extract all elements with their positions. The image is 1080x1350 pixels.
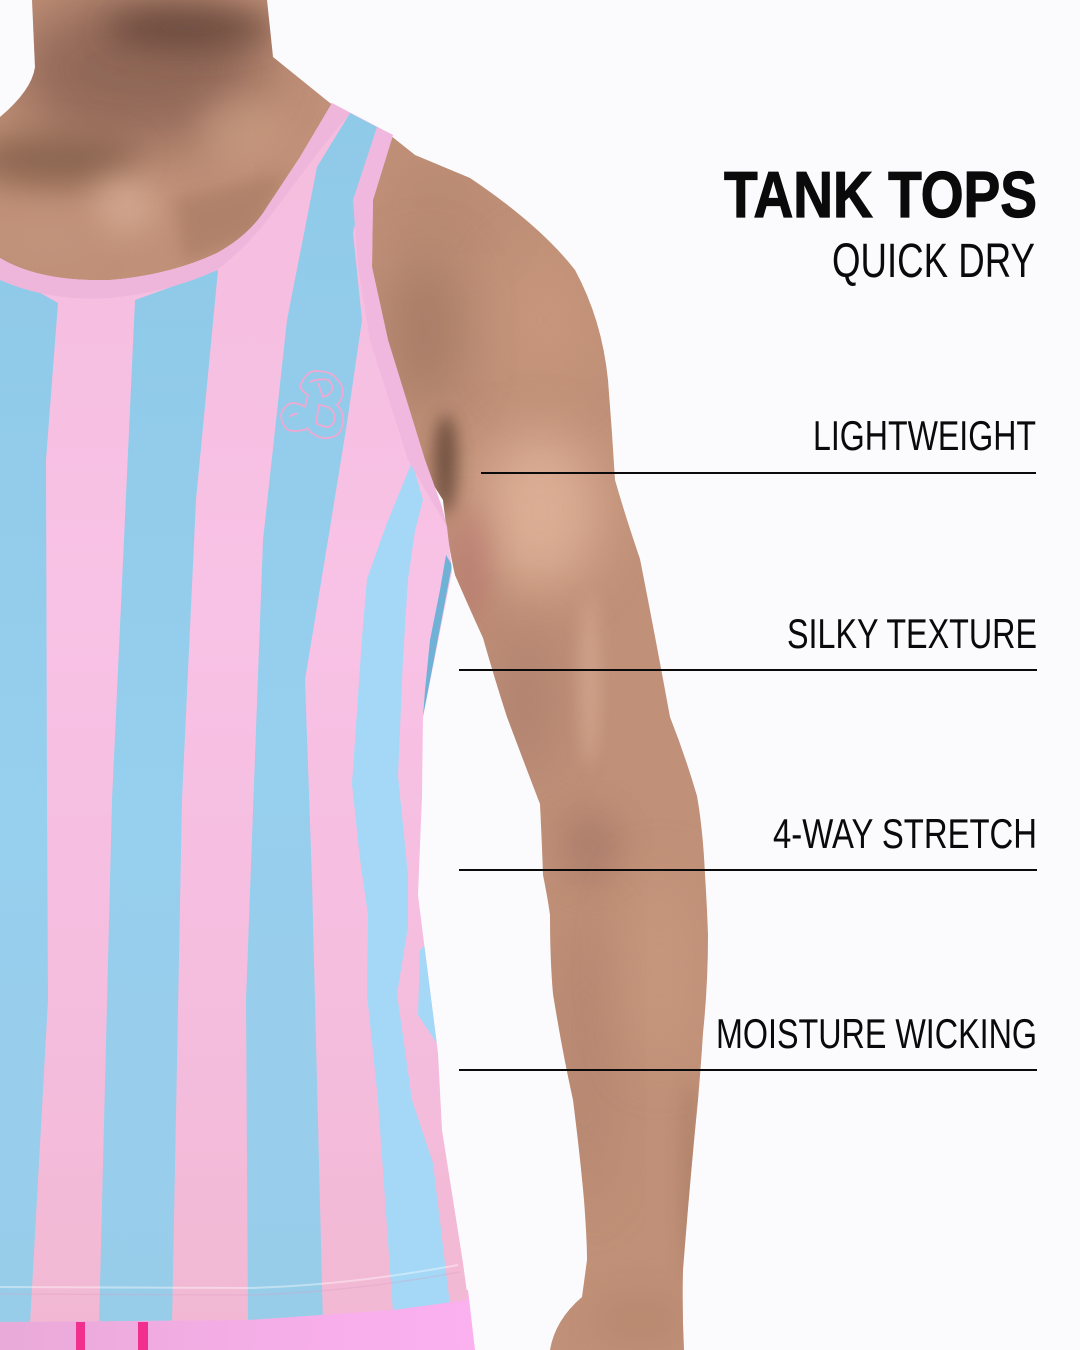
skin: neck, shoulder and arm (0, 0, 720, 1350)
hem stitching (0, 1265, 458, 1288)
shorts (0, 1290, 475, 1350)
neckline binding (0, 103, 350, 299)
logo on tank (281, 371, 343, 438)
side seam sliver upper (423, 555, 452, 717)
side seam sliver lower (418, 945, 438, 1045)
figure: model wearing tank top (0, 0, 720, 1350)
shorts drawstrings (76, 1322, 148, 1350)
armhole binding (353, 127, 447, 527)
blue stripes (0, 113, 377, 1325)
tank top body (0, 103, 468, 1322)
side blue stripe (352, 462, 450, 1312)
